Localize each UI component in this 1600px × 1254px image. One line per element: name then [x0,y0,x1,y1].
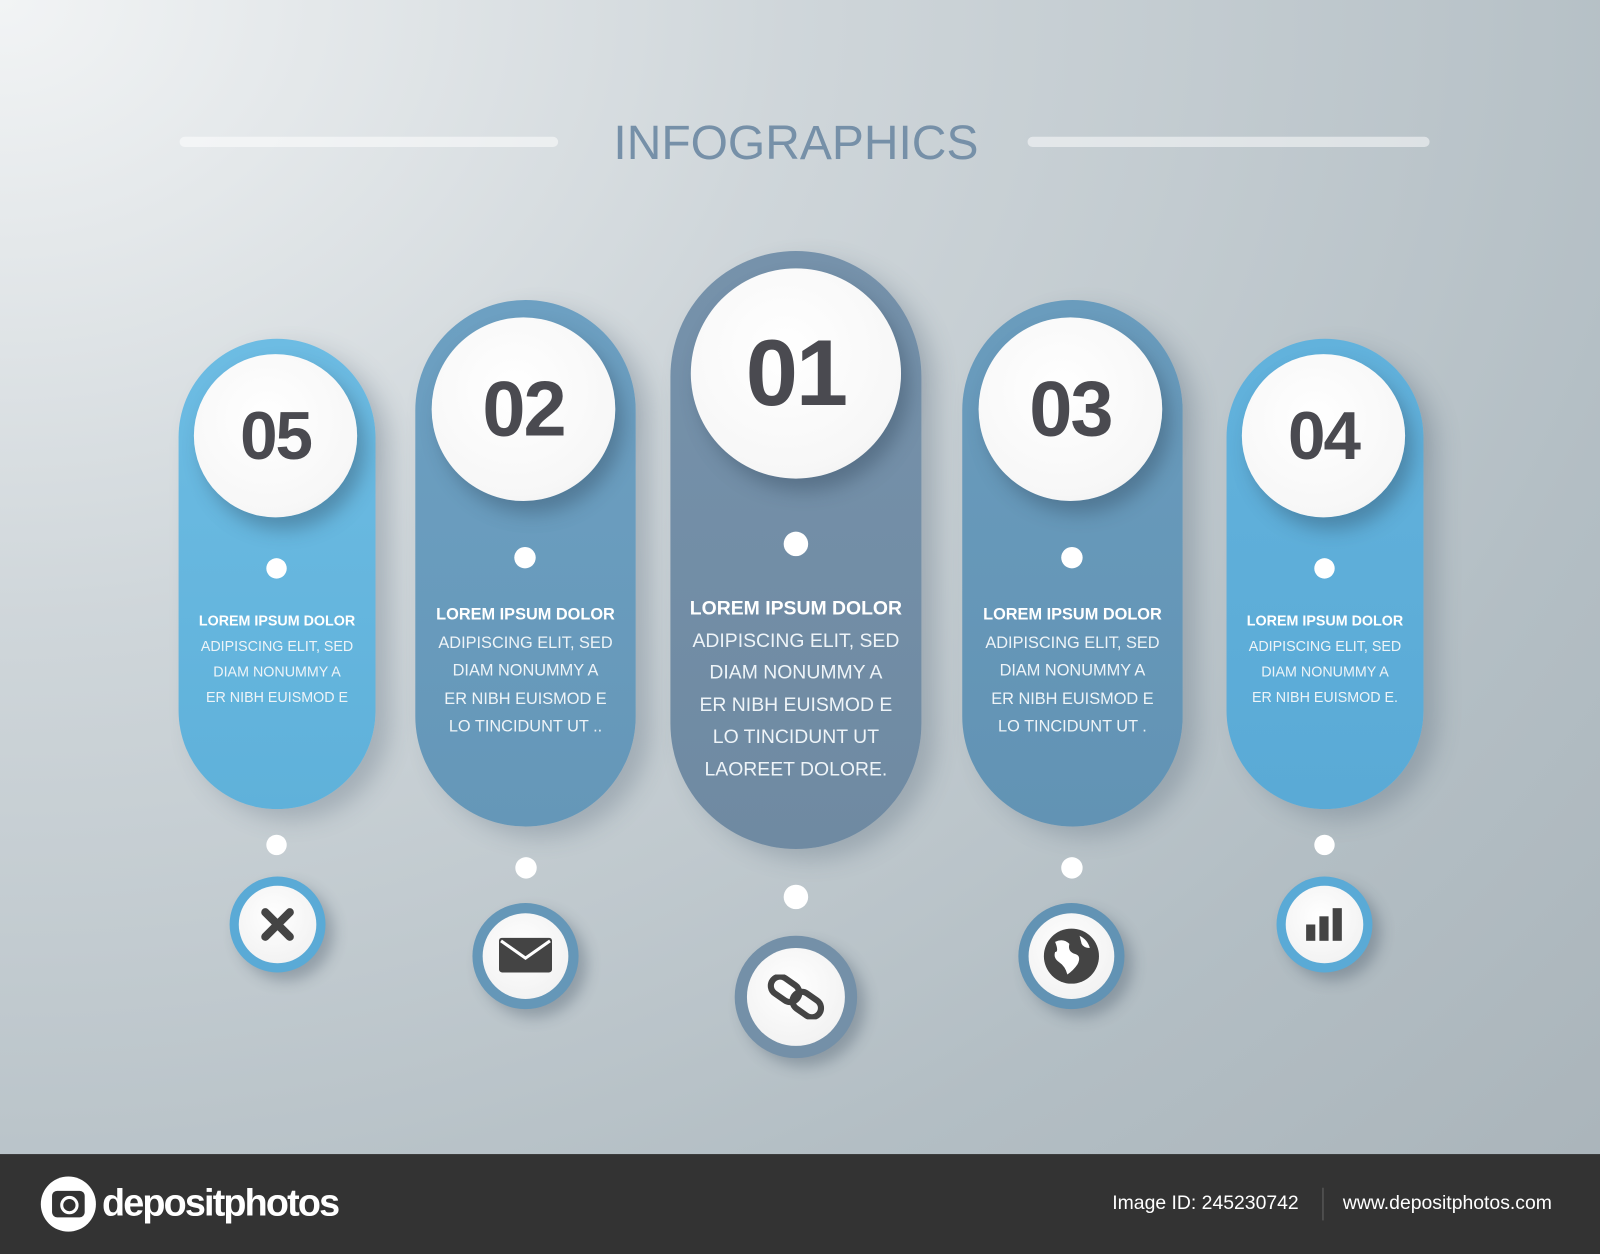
text 01: LOREM IPSUM DOLOR [690,598,902,619]
text 03: ER NIBH EUISMOD E [991,690,1154,708]
dot [514,547,536,568]
text 04: LOREM IPSUM DOLOR [1247,612,1403,629]
panel 01 [670,251,921,849]
connector dot 04 [1314,835,1335,855]
text 04: ADIPISCING ELIT, SED [1249,638,1401,654]
text 03: LOREM IPSUM DOLOR [983,606,1162,623]
number 01 [691,268,901,479]
text 01: ADIPISCING ELIT, SED [692,630,899,652]
text 05 [199,612,355,705]
connector dot 05 [266,835,287,855]
number 05 [194,354,357,517]
text 02: ER NIBH EUISMOD E [444,690,607,708]
text 04 [1247,612,1403,705]
connector dot 02 [515,857,537,879]
text 05: DIAM NONUMMY A [213,663,341,680]
text 02 [436,606,615,736]
panel 02 [415,300,636,827]
dot [1061,547,1083,568]
icon: mail [472,903,579,1009]
text 03: LO TINCIDUNT UT . [998,718,1147,736]
text 01: DIAM NONUMMY A [709,662,882,684]
text 04: ER NIBH EUISMOD E. [1252,689,1398,705]
number 02: 02 [482,366,565,453]
panel 04 [1227,339,1423,809]
title: INFOGRAPHICS [613,115,978,169]
number 02 [432,317,615,501]
text 02: ADIPISCING ELIT, SED [438,634,613,652]
dot [266,558,287,579]
text 03 [983,606,1162,736]
text 01: ER NIBH EUISMOD E [699,694,892,716]
text 02: LOREM IPSUM DOLOR [436,606,615,623]
icon: close [230,877,326,972]
text 03: DIAM NONUMMY A [1000,662,1145,680]
footer logo: depositphotos [102,1182,338,1223]
text 05: LOREM IPSUM DOLOR [199,612,355,629]
text 05: ADIPISCING ELIT, SED [201,638,353,654]
text 01 [690,598,902,780]
number 04: 04 [1288,398,1359,473]
text 05: ER NIBH EUISMOD E [206,689,348,705]
text 02: DIAM NONUMMY A [453,662,598,680]
footer image id: Image ID: 245230742 [1112,1193,1299,1214]
title line right [1028,137,1430,147]
text 02: LO TINCIDUNT UT .. [449,718,602,736]
number 01: 01 [746,321,846,425]
number 03: 03 [1029,366,1111,453]
text 03: ADIPISCING ELIT, SED [985,634,1160,652]
text 01: LO TINCIDUNT UT [713,727,879,748]
icon: bar chart [1277,877,1372,972]
number 03 [979,317,1162,501]
dot [1314,558,1335,579]
text 01: LAOREET DOLORE. [705,759,887,780]
footer url: www.depositphotos.com [1343,1193,1552,1214]
panel 03 [962,300,1183,827]
icon: globe [1018,903,1124,1009]
text 04: DIAM NONUMMY A [1261,663,1389,680]
number 05: 05 [240,398,311,473]
title line left [180,137,558,147]
panel 05 [179,339,376,809]
connector dot 03 [1061,857,1083,879]
number 04 [1242,354,1405,517]
dot [784,532,808,556]
connector dot 01 [784,885,808,909]
icon: link [735,936,857,1058]
footer logo [40,1176,339,1232]
footer bar [0,1154,1600,1254]
